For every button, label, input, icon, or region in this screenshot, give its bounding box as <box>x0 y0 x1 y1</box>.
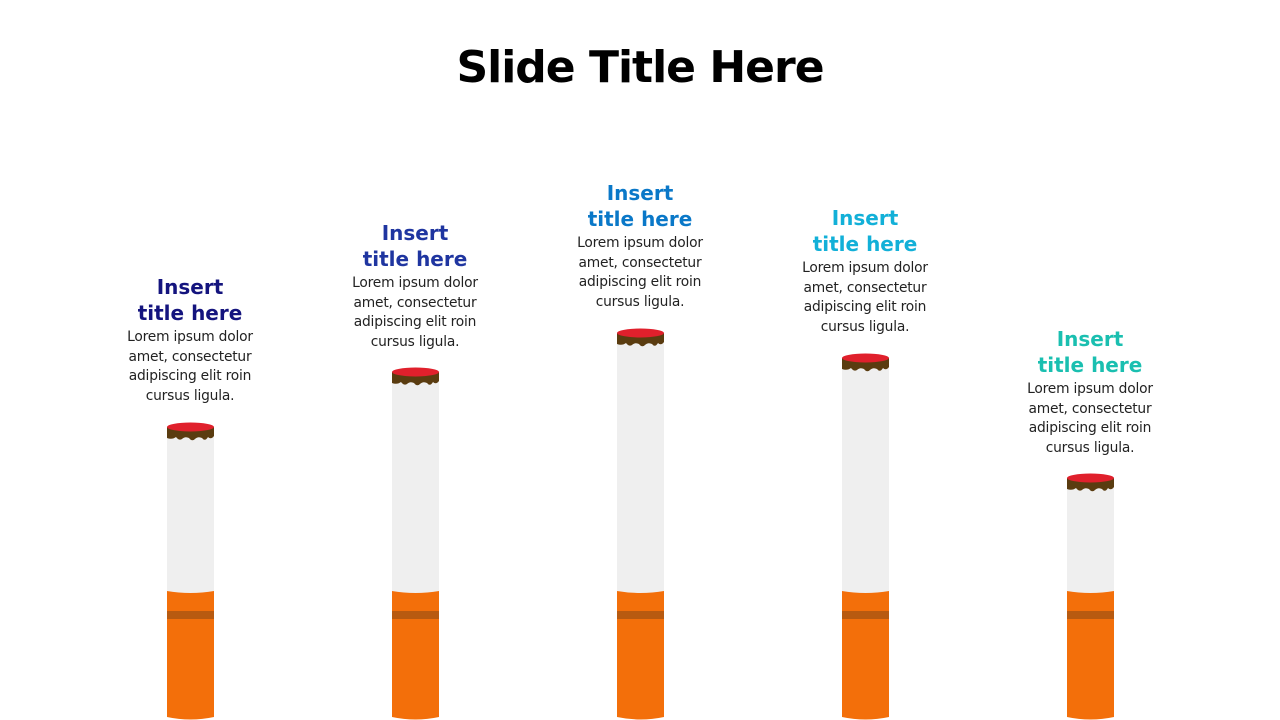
column 2 text: Insert <box>382 221 448 245</box>
cigarette 5 <box>1067 474 1114 720</box>
column 5 text <box>1027 327 1154 456</box>
column 5 text: Insert <box>1057 327 1123 351</box>
column 5 text: title here <box>1038 353 1142 377</box>
column 3 text: Lorem ipsum dolor amet, consectetur adipiscing elit roin cursus ligula. <box>577 235 703 310</box>
column 2 text <box>352 221 478 350</box>
column 1 text: Insert <box>157 275 223 299</box>
column 4 text: Insert <box>832 206 898 230</box>
column 4 text: title here <box>813 232 917 256</box>
cigarette 4 <box>842 354 889 720</box>
column 2 text: title here <box>363 247 467 271</box>
cigarette 3 <box>617 328 664 720</box>
title: Slide Title Here <box>456 42 824 93</box>
column 3 text: title here <box>588 207 692 231</box>
column 1 text <box>127 275 254 404</box>
cigarette 2 <box>392 368 439 720</box>
column 4 text <box>802 206 928 334</box>
column 4 text: Lorem ipsum dolor amet, consectetur adipiscing elit roin cursus ligula. <box>802 260 928 334</box>
column 5 text: Lorem ipsum dolor amet, consectetur adipiscing elit roin cursus ligula. <box>1027 381 1153 456</box>
cigarette 1 <box>167 422 214 720</box>
column 3 text: Insert <box>607 181 673 205</box>
column 1 text: Lorem ipsum dolor amet, consectetur adipiscing elit roin cursus ligula. <box>127 329 253 404</box>
column 1 text: title here <box>138 301 242 325</box>
column 3 text <box>577 181 704 310</box>
column 2 text: Lorem ipsum dolor amet, consectetur adipiscing elit roin cursus ligula. <box>352 275 478 350</box>
